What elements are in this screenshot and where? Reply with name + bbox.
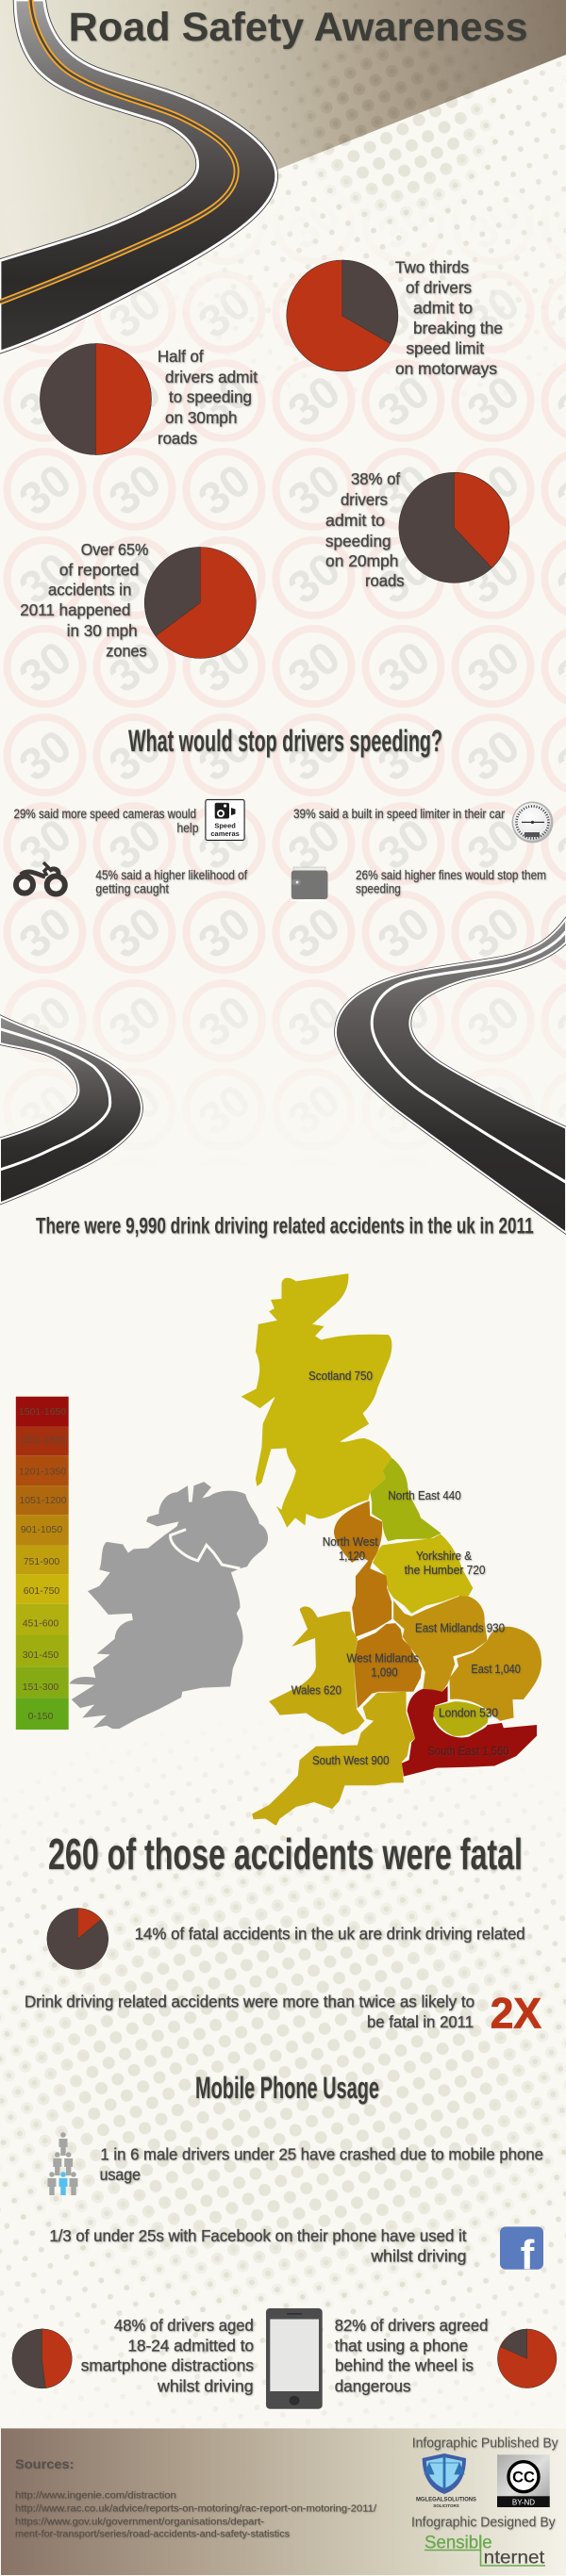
map legend: 451-600 bbox=[23, 1617, 58, 1629]
logo: Creative Commons BY-ND: CC bbox=[512, 2469, 535, 2486]
text: half of drivers: roads bbox=[158, 429, 197, 448]
logo: Creative Commons BY-ND: BY-ND bbox=[512, 2498, 535, 2507]
icon: smartphone bbox=[266, 2308, 323, 2409]
text: 82 percent of drivers agreed: dangerous bbox=[335, 2376, 411, 2395]
text: speed cameras: help bbox=[177, 821, 198, 835]
map labels bbox=[291, 1370, 521, 1767]
text: 1/3 of under 25s with Facebook bbox=[49, 2226, 467, 2265]
road: top left with double yellow line bbox=[0, 0, 276, 352]
map labels: 1,120 bbox=[339, 1550, 365, 1563]
sources: https://www.gov.uk/government/organisations/depart- bbox=[15, 2516, 265, 2527]
map legend: 751-900 bbox=[24, 1556, 59, 1567]
road: middle right with white centre line bbox=[336, 919, 566, 1233]
text: 1/3 of under 25s with Facebook: whilst driving bbox=[370, 2246, 466, 2265]
text: speed cameras bbox=[13, 807, 198, 835]
sources bbox=[15, 2456, 376, 2540]
sources: ment-for-transport/series/road-accidents-and-safety-statistics bbox=[15, 2529, 290, 2540]
map: Northern Ireland border line bbox=[171, 1530, 240, 1568]
pie chart: two thirds bbox=[287, 260, 398, 371]
map legend: 1501-1650 bbox=[19, 1406, 66, 1418]
icon: speed camera sign: cameras bbox=[210, 829, 240, 838]
map labels: South East 1,560 bbox=[428, 1745, 509, 1758]
icon: speed camera sign: Speed bbox=[214, 822, 236, 829]
text: 1/3 of under 25s with Facebook: 1/3 of under 25s with Facebook on their phone have used it bbox=[49, 2226, 467, 2245]
region: South West bbox=[252, 1692, 415, 1826]
logo: MG Legal Solutions bbox=[416, 2453, 477, 2508]
text: higher fines bbox=[356, 868, 546, 895]
map labels: North East 440 bbox=[388, 1489, 461, 1502]
text: two thirds of drivers bbox=[395, 258, 503, 378]
map labels: North West bbox=[323, 1535, 378, 1549]
region: North West bbox=[334, 1501, 391, 1637]
icon: six people with one highlighted bbox=[47, 2132, 77, 2195]
text: 48 percent of drivers aged 18-24: 18-24 admitted to bbox=[128, 2336, 254, 2354]
text: 14 percent of fatal accidents: 14% of fatal accidents in the uk are drink driving related bbox=[135, 1925, 525, 1944]
map legend: 0-150 bbox=[28, 1711, 54, 1722]
pie chart: 48 percent bbox=[12, 2329, 72, 2388]
logo: Sensible Internet bbox=[424, 2533, 545, 2568]
text: half of drivers: Half of bbox=[158, 347, 204, 366]
map legend bbox=[16, 1397, 69, 1730]
region: North East bbox=[370, 1458, 441, 1541]
text: 48 percent of drivers aged 18-24: 48% of drivers aged bbox=[114, 2316, 254, 2335]
text: 48 percent of drivers aged 18-24: smartphone distractions bbox=[81, 2356, 254, 2375]
region: West Midlands bbox=[354, 1623, 422, 1709]
map: UK regions bbox=[241, 1273, 541, 1826]
region: East bbox=[449, 1627, 541, 1721]
text: 1 in 6 male drivers: 1 in 6 male drivers under 25 have crashed due to mobile phone bbox=[100, 2144, 543, 2163]
logo: MG Legal Solutions: MGLEGALSOLUTIONS bbox=[416, 2496, 477, 2502]
text: over 65 percent of accidents: in 30 mph bbox=[67, 621, 138, 640]
text: over 65 percent of accidents: of reported bbox=[59, 561, 139, 580]
map labels: the Humber 720 bbox=[405, 1564, 486, 1577]
map legend: 1051-1200 bbox=[19, 1495, 67, 1506]
sources: http://www.rac.co.uk/advice/reports-on-motoring/rac-report-on-motoring-2011/ bbox=[15, 2503, 376, 2515]
text: 38 percent of drivers bbox=[325, 469, 405, 590]
text: 38 percent of drivers: 38% of bbox=[351, 469, 400, 488]
map labels: East 1,040 bbox=[471, 1663, 521, 1676]
background dots: upper bbox=[196, 61, 566, 380]
text: 1 in 6 male drivers bbox=[100, 2144, 543, 2184]
map legend: 601-750 bbox=[24, 1585, 59, 1597]
text: half of drivers bbox=[158, 347, 258, 448]
text: likelihood of getting caught bbox=[95, 868, 247, 895]
region: London bbox=[433, 1701, 490, 1736]
map labels: West Midlands bbox=[346, 1652, 419, 1665]
map labels: South West 900 bbox=[312, 1754, 390, 1767]
text: half of drivers: drivers admit bbox=[165, 368, 258, 386]
text: over 65 percent of accidents: 2011 happened bbox=[20, 600, 130, 619]
icon: Facebook bbox=[500, 2226, 543, 2278]
logo: Sensible Internet: Sensible bbox=[424, 2533, 492, 2552]
title: Road Safety Awareness bbox=[69, 5, 528, 50]
text: 1 in 6 male drivers: usage bbox=[100, 2165, 141, 2184]
text: half of drivers: on 30mph bbox=[165, 408, 237, 427]
map labels: Yorkshire & bbox=[416, 1550, 473, 1563]
text: likelihood of getting caught: getting caught bbox=[95, 881, 169, 895]
text: over 65 percent of accidents: zones bbox=[106, 642, 147, 661]
map labels: Wales 620 bbox=[291, 1684, 341, 1698]
text: 48 percent of drivers aged 18-24: whilst driving bbox=[157, 2376, 254, 2395]
text: two thirds of drivers: speed limit bbox=[406, 339, 484, 358]
icon: speed camera sign bbox=[206, 799, 244, 840]
text: half of drivers: to speeding bbox=[169, 387, 252, 406]
region: Yorkshire and the Humber bbox=[373, 1534, 473, 1614]
map labels: 1,090 bbox=[371, 1666, 398, 1680]
text: likelihood of getting caught: 45% said a higher likelihood of bbox=[95, 868, 247, 882]
text: twice as likely to be fatal: Drink driving related accidents were more than twice as likely to bbox=[25, 1993, 474, 2011]
text: two thirds of drivers: Two thirds bbox=[395, 258, 469, 277]
text: 38 percent of drivers: admit to bbox=[325, 511, 385, 530]
logo: MG Legal Solutions: SOLICITORS bbox=[433, 2503, 459, 2508]
text: 82 percent of drivers agreed: 82% of drivers agreed bbox=[335, 2316, 488, 2335]
map labels: East Midlands 930 bbox=[415, 1621, 505, 1634]
text: 38 percent of drivers: roads bbox=[365, 571, 405, 590]
text: two thirds of drivers: of drivers bbox=[406, 278, 472, 297]
footer band bbox=[1, 2428, 566, 2575]
region: South East bbox=[402, 1685, 537, 1777]
text: 82 percent of drivers agreed: behind the wheel is bbox=[335, 2356, 474, 2375]
map labels: Scotland 750 bbox=[308, 1370, 373, 1383]
text: over 65 percent of accidents bbox=[20, 540, 148, 661]
map legend: 301-450 bbox=[23, 1649, 58, 1661]
text: twice as likely to be fatal bbox=[25, 1993, 474, 2031]
map legend: 1351-1500 bbox=[19, 1435, 66, 1446]
sources: http://www.ingenie.com/distraction bbox=[15, 2489, 176, 2501]
logo: Sensible Internet: nternet bbox=[484, 2548, 545, 2568]
icon: handcuffs bbox=[16, 862, 65, 894]
text: 38 percent of drivers: speeding bbox=[325, 532, 391, 550]
pie chart: 14 percent bbox=[47, 1908, 108, 1970]
icon: 2X: 2X bbox=[491, 1989, 541, 2037]
map labels: London 530 bbox=[439, 1707, 498, 1720]
text: two thirds of drivers: on motorways bbox=[395, 359, 497, 378]
background dots: lower bbox=[0, 1756, 566, 2426]
icon: Facebook: f bbox=[521, 2232, 535, 2278]
text: twice as likely to be fatal: be fatal in 2011 bbox=[367, 2012, 474, 2031]
heading: mobile phone usage: Mobile Phone Usage bbox=[195, 2071, 379, 2105]
text: two thirds of drivers: admit to bbox=[413, 298, 473, 317]
text: infographic designed by: Infographic Designed By bbox=[411, 2516, 556, 2531]
text: 38 percent of drivers: drivers bbox=[341, 490, 388, 509]
map legend: 151-300 bbox=[23, 1682, 58, 1693]
text: higher fines: speeding bbox=[356, 881, 401, 895]
pie chart: 82 percent bbox=[497, 2329, 557, 2388]
text: infographic published by: Infographic Published By bbox=[412, 2437, 558, 2452]
text: 82 percent of drivers agreed: that using a phone bbox=[335, 2336, 468, 2354]
pie chart: over 65 percent bbox=[144, 547, 256, 658]
region: East Midlands bbox=[393, 1596, 488, 1694]
icon: wallet bbox=[291, 867, 328, 901]
text: over 65 percent of accidents: Over 65% bbox=[81, 540, 148, 559]
logo: Creative Commons BY-ND bbox=[497, 2454, 550, 2507]
road: middle left with white centre line bbox=[0, 1016, 142, 1203]
map legend: 1201-1350 bbox=[19, 1467, 66, 1478]
sources: Sources: bbox=[15, 2456, 74, 2471]
region: Scotland bbox=[241, 1273, 391, 1528]
text: speed cameras: 29% said more speed cameras would bbox=[13, 807, 196, 821]
background: repeating 30 mph signs bbox=[4, 290, 566, 1044]
text: two thirds of drivers: breaking the bbox=[413, 319, 503, 337]
header wedge bbox=[0, 0, 566, 283]
map legend: 901-1050 bbox=[21, 1524, 62, 1535]
text: 38 percent of drivers: on 20mph bbox=[325, 551, 398, 570]
region: Wales bbox=[269, 1606, 365, 1734]
pie chart: half bbox=[40, 343, 151, 454]
text: 82 percent of drivers agreed bbox=[335, 2316, 488, 2395]
text: speed limiter: 39% said a built in speed limiter in their car bbox=[293, 807, 505, 821]
text: 48 percent of drivers aged 18-24 bbox=[81, 2316, 254, 2395]
map: Ireland bbox=[69, 1482, 268, 1729]
pie chart: 38 percent bbox=[399, 472, 509, 582]
icon: speedometer bbox=[511, 801, 553, 843]
text: over 65 percent of accidents: accidents in bbox=[48, 581, 131, 599]
